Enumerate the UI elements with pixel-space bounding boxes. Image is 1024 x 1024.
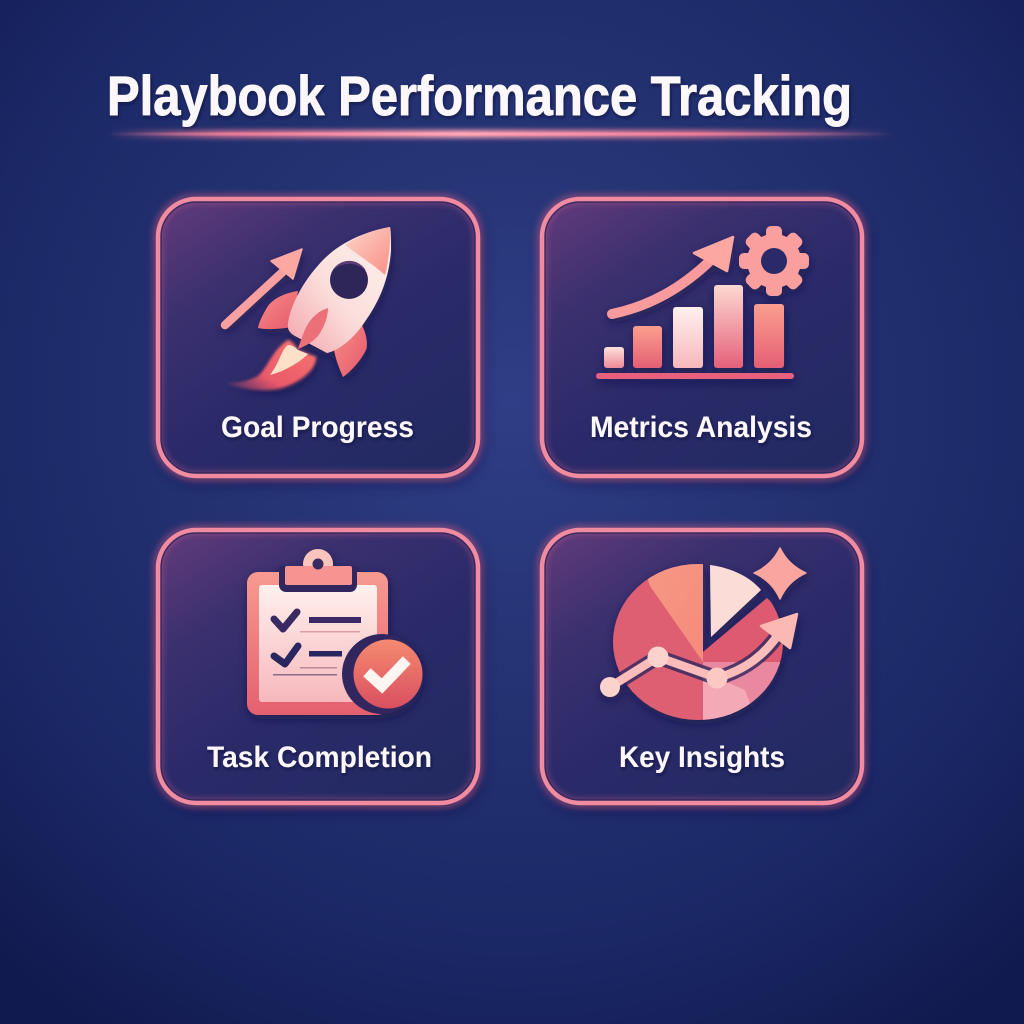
icon: bar chart with arrow and gear (596, 226, 809, 379)
gear (739, 226, 809, 296)
window (330, 261, 368, 299)
trend arrow (612, 259, 712, 314)
panel: goal progress (157, 198, 482, 483)
icon: rocket with arrow (225, 227, 391, 390)
flame (226, 340, 316, 390)
arrow (225, 268, 287, 325)
star (754, 548, 806, 599)
label: Metrics Analysis (590, 411, 812, 444)
right fin (334, 322, 367, 377)
paper (259, 585, 377, 702)
panel: key insights (541, 529, 866, 810)
check badge (342, 634, 422, 714)
board (247, 572, 388, 715)
trend line halo (610, 632, 780, 687)
title underline (108, 130, 893, 138)
label: Key Insights (619, 741, 785, 774)
icon: clipboard with check badge (247, 549, 422, 715)
bars (604, 285, 784, 368)
rocket body (288, 227, 391, 353)
pie (612, 564, 792, 726)
clip (279, 549, 357, 592)
trend line (600, 614, 797, 697)
left fin (258, 291, 298, 329)
panel: task completion (157, 529, 482, 810)
checklist (274, 612, 298, 664)
icon: pie chart with trend line and star (600, 548, 806, 730)
panel: metrics analysis (541, 198, 866, 483)
nose cone (345, 227, 390, 275)
centre fin (298, 308, 328, 349)
baseline (596, 373, 794, 379)
title: Playbook Performance Tracking (107, 64, 852, 127)
label: Task Completion (207, 741, 432, 774)
label: Goal Progress (221, 411, 414, 444)
pie wedge (710, 565, 761, 637)
